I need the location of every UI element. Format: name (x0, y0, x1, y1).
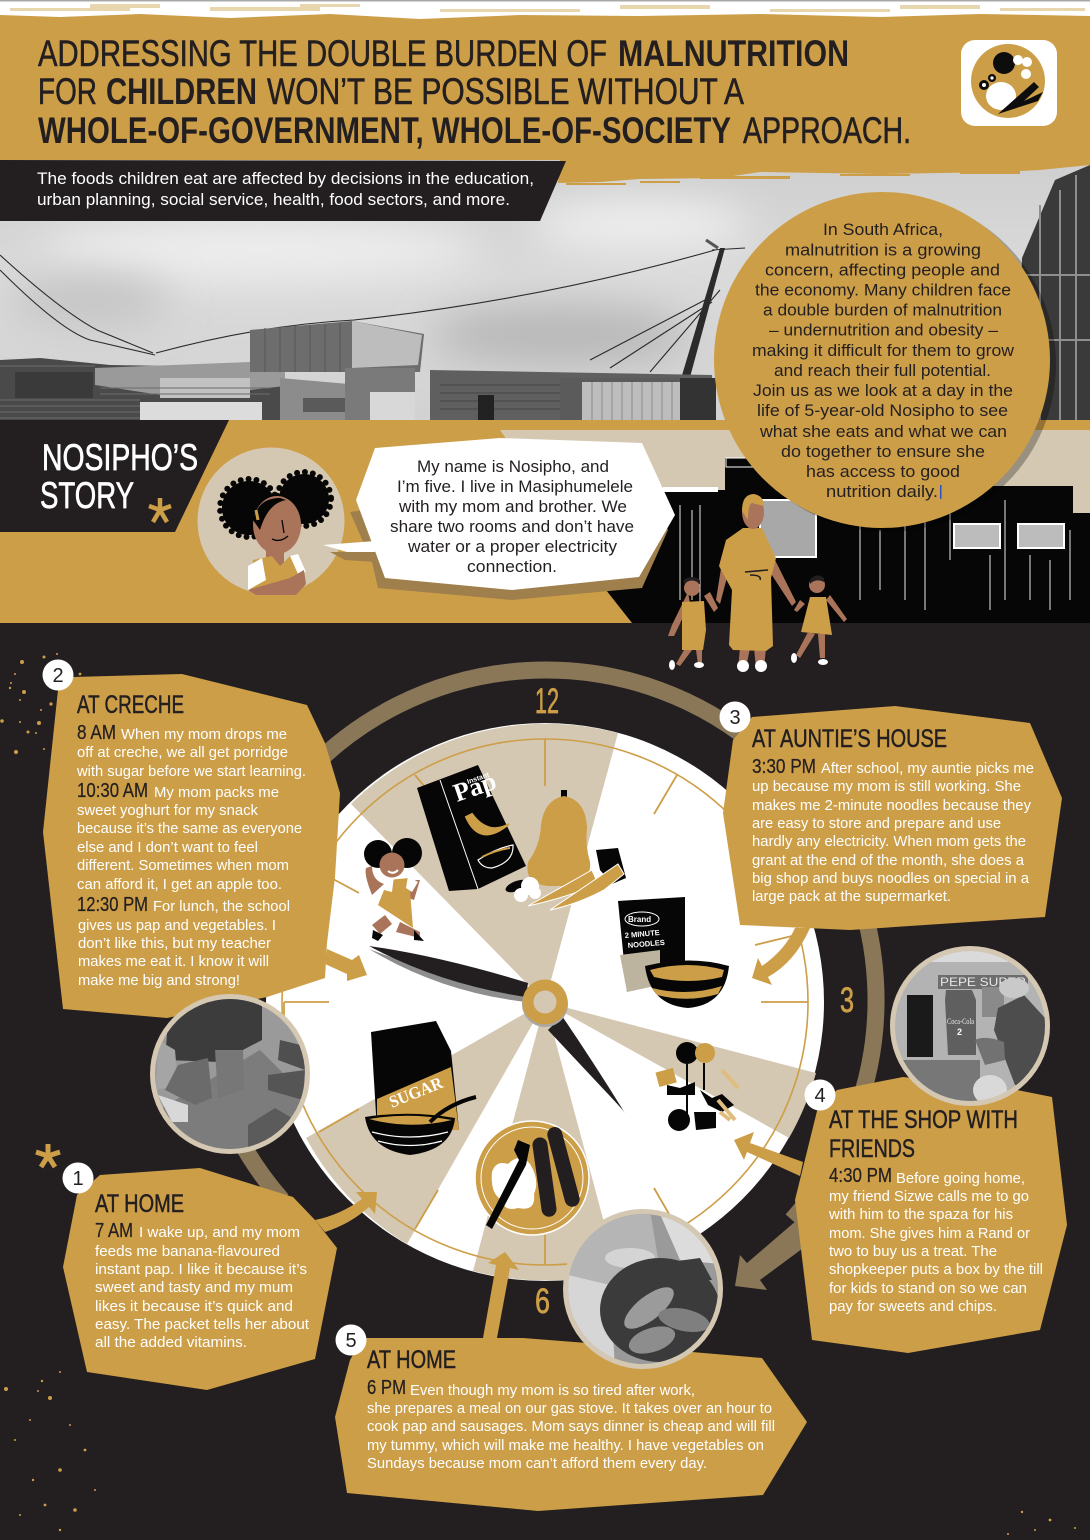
badge 2: 2 (52, 665, 64, 687)
speech bubble: connection. (467, 557, 557, 576)
panel 2: at creche (43, 674, 340, 1018)
illustration: instant pap box: Instant (466, 772, 491, 786)
arc arrow around the clock (240, 670, 876, 1290)
illustration: sugar packet and bowl: SUGAR (386, 1073, 446, 1112)
panel 4: at the shop with friends: FRIENDS (829, 1135, 915, 1163)
callout: intro circle: has access to good (806, 463, 960, 481)
panel 2: at creche: because it’s the same as everyone (77, 821, 302, 837)
callout: intro circle: Join us as we look at a day in the (753, 382, 1013, 400)
callout: intro circle: making it difficult for them to grow (752, 342, 1014, 360)
badge 4 (804, 1080, 836, 1110)
arrow: panel 4 to clock (734, 1132, 803, 1176)
panel 2: at creche: 12:30 PM (77, 894, 148, 916)
panel 4: at the shop with friends: Before going home, (896, 1171, 1025, 1187)
clock numerals (535, 682, 854, 1321)
callout: intro circle: the economy. Many children face (755, 282, 1011, 300)
panel 3: at auntie's house: are easy to store and prepare and use (752, 816, 1001, 832)
panel 3: at auntie's house: 3:30 PM (752, 756, 816, 778)
callout: intro circle: – undernutrition and obesity – (769, 322, 999, 340)
callout: intro circle: what she eats and what we can (759, 423, 1007, 441)
callout: intro circle: a double burden of malnutrition (763, 302, 1002, 320)
panel 1: at home morning: feeds me banana-flavoured (95, 1244, 280, 1260)
photo: informal settlement skyline (0, 160, 1090, 422)
panel 4: at the shop with friends (795, 1077, 1067, 1353)
panel 2: at creche: My mom packs me (154, 785, 279, 801)
heading: Nosipho's story: NOSIPHO’S (42, 437, 198, 478)
middle shacks (250, 321, 424, 372)
photo: sausages in a pan (563, 1209, 730, 1370)
panel 2: at creche: can afford it, I get an apple too. (77, 877, 282, 893)
asterisk (36, 1144, 60, 1167)
panel 5: at home evening: AT HOME (367, 1346, 456, 1374)
panel 5: at home evening: cook pap and sausages. Mom says dinner is cheap and will fill (367, 1419, 775, 1435)
callout: intro circle: malnutrition is a growing (785, 242, 981, 260)
panel 3: at auntie's house: grant at the end of the month, she does a (752, 853, 1025, 869)
illustration: instant pap box: Pap (450, 766, 500, 808)
left shacks (0, 358, 285, 420)
badge 3 (720, 702, 750, 732)
callout: intro circle (714, 192, 1056, 532)
title: APPROACH. (743, 110, 911, 151)
title: ADDRESSING THE DOUBLE BURDEN OF (38, 33, 607, 74)
photo: spaza shop: 2 (957, 1027, 962, 1037)
panel 5: at home evening: Even though my mom is so tired after work, (410, 1383, 695, 1399)
illustration: 2-minute noodles (618, 897, 729, 1008)
arrow: panel 5 to clock (483, 1252, 519, 1338)
badge 1 (62, 1162, 94, 1194)
photo: spaza shop (890, 946, 1050, 1106)
panel 5: at home evening: Sundays because mom can’t afford them every day. (367, 1456, 707, 1472)
panel 4: at the shop with friends: shopkeeper puts a box by the till (829, 1262, 1043, 1278)
clock hands (369, 946, 625, 1113)
illustration: girl running (364, 838, 424, 941)
illustration: 2-minute noodles: Brand (628, 915, 651, 924)
illustration: plate with pap and sausages (475, 1121, 589, 1235)
panel 2: at creche: different. Sometimes when mom (77, 858, 289, 874)
panel 2: at creche: When my mom drops me (121, 727, 287, 743)
callout: intro circle: and reach their full potential. (774, 362, 991, 380)
panel 1: at home morning: all the added vitamins. (95, 1335, 247, 1351)
panel 1: at home morning: 7 AM (95, 1220, 133, 1242)
panel 5: at home evening: she prepares a meal on our gas stove. It takes over an hour to (367, 1401, 772, 1417)
panel 2: at creche: AT CRECHE (77, 691, 184, 719)
right timber structure (1018, 165, 1090, 420)
panel 1: at home morning: easy. The packet tells her about (95, 1317, 309, 1333)
panel 2: at creche: 8 AM (77, 722, 116, 744)
illustration: 2-minute noodles: NOODLES (627, 938, 665, 950)
panel 4: at the shop with friends: mom. She gives him a Rand or (829, 1226, 1030, 1242)
panel 4: at the shop with friends: my friend Sizwe calls me to go (829, 1189, 1029, 1205)
banner: subtitle (0, 160, 566, 221)
panel 4: at the shop with friends: AT THE SHOP WITH (829, 1106, 1018, 1134)
decorative splatter (0, 653, 1076, 1535)
panel 5: at home evening: my tummy, which will make me healthy. I have vegetables on (367, 1438, 764, 1454)
callout: intro circle: nutrition daily. (826, 483, 938, 501)
heading: Nosipho's story (0, 420, 229, 532)
title: CHILDREN (106, 71, 257, 112)
clock numerals: 3 (840, 981, 854, 1020)
photo: spaza shop: PEPE SUPER (940, 975, 1026, 989)
callout: intro circle: do together to ensure she (781, 443, 985, 461)
illustration: 2-minute noodles: 2 MINUTE (624, 928, 660, 940)
callout: intro circle: life of 5-year-old Nosipho to see (757, 402, 1008, 420)
panel 2: at creche: gives us pap and vegetables. I (78, 918, 276, 934)
panel 1: at home morning: sweet and tasty and my mum (95, 1280, 293, 1296)
badge 5: 5 (345, 1330, 357, 1352)
photo: spaza shop: Coca-Cola (947, 1017, 974, 1026)
speech bubble: with my mom and brother. We (398, 497, 627, 516)
speech bubble (323, 438, 675, 600)
panel 4: at the shop with friends: 4:30 PM (829, 1165, 892, 1187)
panel 3: at auntie's house: large pack at the supermarket. (752, 889, 951, 905)
clock numerals: 6 (535, 1282, 550, 1321)
panel 4: at the shop with friends: two to buy us a treat. The (829, 1244, 997, 1260)
panel 1: at home morning (63, 1168, 337, 1390)
top gold header band (0, 0, 1090, 185)
panel 2: at creche: makes me eat it. I know it will (78, 954, 269, 970)
title: WON’T BE POSSIBLE WITHOUT A (267, 71, 744, 112)
title: WHOLE-OF-GOVERNMENT, WHOLE-OF-SOCIETY (38, 110, 731, 151)
speech bubble: My name is Nosipho, and (417, 457, 609, 476)
panel 3: at auntie's house: After school, my auntie picks me (821, 761, 1034, 777)
badge 4: 4 (814, 1085, 826, 1107)
badge 5 (336, 1324, 366, 1356)
pole (682, 248, 725, 375)
illustration: instant pap box (417, 765, 526, 891)
panel 3: at auntie's house: AT AUNTIE’S HOUSE (752, 725, 947, 753)
title (38, 33, 911, 151)
panel 5: at home evening: 6 PM (367, 1377, 406, 1399)
arrow: panel 1 to clock (315, 1192, 377, 1232)
panel 2: at creche: else and I don’t want to feel (77, 840, 258, 856)
badge 2 (42, 660, 74, 690)
panel 3: at auntie's house: big shop and buys noodles on special in a (752, 871, 1030, 887)
badge 3: 3 (729, 707, 741, 729)
illustration: sweets and lollipops (655, 1042, 738, 1131)
arrow: panel 2 to clock (325, 949, 367, 981)
icon: plate of food logo (961, 40, 1057, 126)
callout: intro circle: In South Africa, (823, 221, 943, 239)
wires (0, 248, 745, 372)
panel 1: at home morning: instant pap. I like it because it’s (95, 1262, 307, 1278)
clock numerals: 12 (535, 682, 559, 721)
arrow: panel 3 to clock (752, 928, 810, 985)
panel 5: at home evening (335, 1338, 807, 1511)
portrait: Nosipho (198, 448, 344, 595)
panel 3: at auntie's house: makes me 2-minute noodles because they (752, 798, 1032, 814)
illustration: sugar packet and bowl (365, 1021, 476, 1155)
illustration: butternut, mushrooms and carrots (504, 790, 626, 910)
speech bubble: I’m five. I live in Masiphumelele (397, 477, 633, 496)
panel 1: at home morning: AT HOME (95, 1190, 184, 1218)
panel 2: at creche: with sugar before we start learning. (76, 764, 306, 780)
photo: child playing with blocks (150, 994, 310, 1155)
panel 4: at the shop with friends: with him to the spaza for his (828, 1207, 1013, 1223)
panel 3: at auntie's house (723, 706, 1062, 930)
badge 1: 1 (72, 1168, 84, 1190)
clock face (266, 723, 824, 1281)
story band background (0, 420, 1090, 623)
panel 2: at creche: make me big and strong! (78, 973, 240, 989)
panel 2: at creche: 10:30 AM (77, 780, 148, 802)
heading: Nosipho's story: STORY (40, 475, 134, 516)
panel 2: at creche: sweet yoghurt for my snack (77, 803, 259, 819)
panel 2: at creche: don’t like this, but my teacher (78, 936, 271, 952)
callout: intro circle: concern, affecting people and (765, 262, 1000, 280)
right shacks (430, 370, 715, 420)
speech bubble: water or a proper electricity (407, 537, 618, 556)
panel 3: at auntie's house: hardly any electricity. When mom gets the (752, 834, 1026, 850)
banner: subtitle: urban planning, social service, health, food sectors, and more. (37, 191, 510, 209)
panel 2: at creche: off at creche, we all get porridge (77, 745, 288, 761)
panel 3: at auntie's house: up because my mom is still working. She (752, 779, 1021, 795)
illustration: mother and two children (668, 494, 847, 672)
panel 1: at home morning: likes it because it’s quick and (95, 1299, 293, 1315)
title: FOR (38, 71, 97, 112)
panel 1: at home morning: I wake up, and my mom (139, 1225, 300, 1241)
speech bubble: share two rooms and don’t have (390, 517, 634, 536)
title: MALNUTRITION (618, 33, 849, 74)
panel 4: at the shop with friends: for kids to stand on so we can (829, 1281, 1027, 1297)
panel 2: at creche: For lunch, the school (153, 899, 290, 915)
panel 4: at the shop with friends: pay for sweets and chips. (829, 1299, 997, 1315)
banner: subtitle: The foods children eat are affected by decisions in the education, (37, 170, 534, 188)
